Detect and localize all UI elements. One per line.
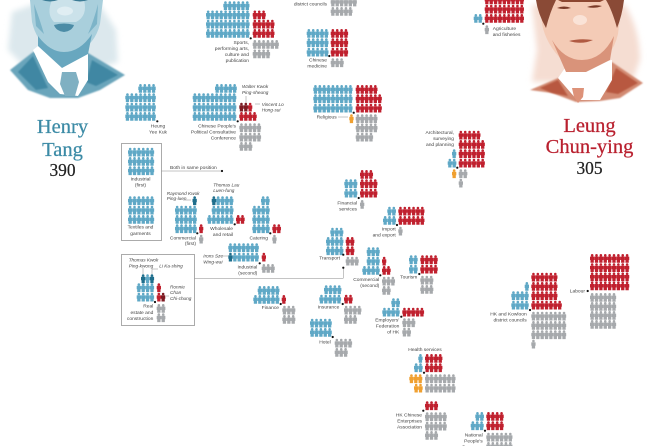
label: Hotel: Hotel	[319, 339, 331, 345]
grey voter	[199, 235, 203, 244]
grey voters	[331, 0, 357, 16]
group: Tourism	[400, 255, 438, 294]
label: Sports: publication	[226, 58, 249, 64]
blue voters	[362, 247, 380, 275]
marker dot	[358, 197, 360, 199]
panel: real estate and construction box	[122, 254, 194, 326]
group: Industrial (second)	[203, 243, 275, 276]
group: Chinese People's Political Consultative Conference	[191, 84, 284, 151]
label: Wholesale and retail: and retail	[213, 232, 233, 238]
group: HK Chinese Enterprises Association	[396, 401, 447, 440]
annotation: Li Ka-shing: Li Ka-shing	[159, 264, 183, 269]
label: Import and export: and export	[373, 233, 396, 239]
grey voters	[590, 293, 616, 329]
vote count: 390: 390	[49, 160, 76, 180]
blue voters	[409, 255, 418, 274]
label: Industrial (second): (second)	[238, 270, 258, 276]
label: Real estate and construction: estate and	[130, 310, 154, 316]
annotation: Raymond Kwok: Ping-luen	[167, 196, 187, 201]
red voters	[356, 85, 382, 112]
blue voters	[414, 354, 423, 372]
label: Labour: Labour	[570, 289, 585, 295]
marker dot	[269, 232, 271, 234]
blue voters	[344, 179, 357, 198]
label: Chinese medicine: medicine	[307, 64, 327, 70]
blue voters	[474, 14, 482, 23]
label: Sports: performing arts,	[215, 46, 249, 52]
blue voters	[448, 149, 456, 168]
annotation: Thomas Kwok: Thomas Kwok	[129, 258, 159, 263]
panel: both in same position box	[122, 144, 162, 240]
group: Wholesale and retail	[207, 182, 245, 238]
marker dot	[484, 430, 486, 432]
callout: both in same position	[162, 165, 223, 172]
heading: Henry Tang: Tang	[42, 139, 83, 161]
grey voters	[335, 339, 352, 357]
label: Real estate and construction: construction	[127, 316, 154, 322]
grey voters	[402, 318, 415, 336]
callout: both in same position: Both in same position	[170, 165, 217, 171]
red voters	[402, 308, 424, 316]
label: Chinese medicine: Chinese	[309, 58, 327, 64]
annotation: Ronnie Chan: Chi-chung	[170, 296, 192, 301]
label: HK Chinese Enterprises Association: Association	[397, 425, 422, 431]
red voters	[590, 254, 629, 290]
annotation: Irons Sze: Wing-wai	[203, 260, 223, 265]
label: Industrial (second): Industrial	[237, 264, 257, 270]
blue voters	[313, 85, 353, 112]
red voters	[346, 237, 354, 255]
group: Commercial (first)	[167, 191, 203, 247]
heading: Henry Tang: Henry	[37, 116, 89, 138]
label: Sports: culture and	[225, 52, 249, 58]
leader lines	[246, 96, 260, 104]
group: Commercial (second)	[353, 247, 395, 295]
label: Employers' Federation: of HK	[387, 330, 400, 336]
group: Catering	[250, 196, 281, 244]
label: Agriculture and fisheries: and fisheries	[493, 32, 521, 38]
label: Industrial (first): (first)	[135, 183, 146, 189]
blue voters	[511, 282, 529, 310]
marker dot	[423, 372, 425, 374]
red voters	[239, 103, 257, 121]
marker dot	[400, 316, 402, 318]
marker dot	[332, 336, 334, 338]
grey voters	[425, 412, 447, 440]
label: National People's Congress: People's	[464, 439, 483, 445]
orange voter	[452, 169, 456, 178]
annotation: Ronnie Chan: Ronnie	[170, 284, 185, 289]
red voters	[236, 215, 245, 224]
label: Commercial (second): Commercial	[353, 277, 379, 283]
red voters	[425, 401, 438, 410]
marker dot	[529, 309, 531, 311]
orange voter	[349, 114, 354, 123]
label: Financial services: Financial	[337, 200, 357, 206]
label: district councils: district councils	[294, 2, 328, 8]
blue voters	[193, 84, 237, 121]
label: Tourism: Tourism	[400, 274, 417, 280]
label: CPPCC: Political Consultative	[191, 129, 236, 135]
blue voters	[206, 1, 250, 38]
grey voters	[282, 306, 295, 324]
red voters	[382, 257, 391, 275]
red voters	[253, 10, 274, 38]
marker dot	[259, 262, 261, 264]
group: Heung Yee Kuk	[125, 84, 168, 136]
label: Heung Yee Kuk: Heung	[151, 124, 165, 130]
marker dot	[250, 37, 252, 39]
label: Architectural: surveying	[433, 136, 454, 142]
label: Financial services: services	[339, 206, 358, 212]
red voters	[459, 131, 485, 168]
red voters	[272, 224, 281, 233]
connector: real estate to transport	[194, 267, 344, 278]
marker dot	[353, 112, 355, 114]
marker dot	[196, 232, 198, 234]
red voters	[485, 0, 524, 23]
red voters	[331, 29, 348, 56]
group: Chinese medicine	[307, 29, 348, 70]
group: Insurance	[318, 285, 361, 324]
marker dot	[342, 303, 344, 305]
grey voters	[356, 114, 377, 142]
blue voters	[207, 196, 233, 224]
blue voters	[228, 243, 259, 262]
label: Textiles and garments: Textiles and	[128, 225, 154, 231]
blue voters	[326, 228, 343, 255]
annotation: Walter Kwok: Walter Kwok	[242, 84, 269, 89]
label: Insurance: Insurance	[318, 304, 340, 310]
Raymond Kwok voter	[192, 196, 197, 205]
label: Architectural: and planning	[426, 142, 454, 148]
red voters	[360, 170, 377, 198]
blue voters	[310, 319, 332, 337]
marker dot	[456, 167, 458, 169]
group: Import and export	[373, 207, 424, 239]
group: HK and Kowloon district councils	[490, 273, 566, 348]
annotation: Thomas Lau: Luen-fung	[213, 188, 235, 193]
red voter	[199, 224, 203, 233]
group: Financial services	[337, 170, 377, 212]
red voters	[398, 207, 424, 225]
annotation: Thomas Lau: Thomas Lau	[213, 182, 240, 187]
label: CPPCC: Conference	[211, 135, 236, 141]
annotation: Thomas Kwok: Ping-kwong	[129, 264, 154, 269]
heading: Henry Tang	[37, 116, 89, 180]
annotation: Vincent Lo: Hong-sui	[262, 107, 281, 112]
label: Import and export: Import	[382, 227, 396, 233]
label: HK Chinese Enterprises Association: Enterprises	[397, 419, 423, 425]
red voters	[420, 255, 438, 274]
Thomas Lau voter	[212, 196, 216, 205]
heading: Leung Chun-ying: Chun-ying	[546, 136, 633, 158]
grey voters	[420, 276, 433, 294]
label: Architectural: Architectural,	[425, 130, 454, 136]
label: Textiles and garments: garments	[130, 231, 151, 237]
group: Hotel	[310, 319, 352, 357]
label: CPPCC: Chinese People's	[198, 123, 237, 129]
label: Employers' Federation: Employers'	[375, 318, 399, 324]
red voters	[425, 354, 442, 372]
marker dot	[154, 301, 156, 303]
heading: Leung Chun-ying	[546, 115, 633, 178]
blue voters	[252, 196, 270, 233]
group: Agriculture and fisheries	[474, 0, 524, 38]
grey voters	[157, 304, 165, 322]
label: HK Chinese Enterprises Association: HK Chinese	[396, 413, 422, 419]
group: Health services	[408, 347, 456, 392]
grey voter	[398, 227, 403, 236]
grey voter	[485, 25, 489, 34]
label: Industrial (first): Industrial	[131, 177, 150, 183]
group: Architectural, surveying and planning	[425, 130, 485, 188]
grey voters	[239, 123, 261, 151]
grey voters	[346, 257, 359, 266]
annotation: Walter Kwok: Ping-sheung	[242, 90, 269, 95]
annotation: Raymond Kwok: Raymond Kwok	[167, 191, 200, 196]
marker dot	[342, 254, 344, 256]
group: Employers' Federation of HK	[375, 298, 424, 336]
group: Finance	[253, 286, 295, 324]
grey voters	[382, 277, 395, 295]
leaders voters	[141, 274, 154, 283]
label: HK and Kowloon district councils: district councils	[494, 317, 527, 323]
blue voters	[175, 206, 197, 233]
annotation: Ronnie Chan: Chan	[170, 290, 182, 295]
blue voters	[137, 283, 154, 302]
grey voters	[531, 312, 566, 348]
label: Heung Yee Kuk: Yee Kuk	[149, 130, 168, 136]
marker dot	[379, 274, 381, 276]
group: Religious	[313, 85, 382, 142]
label: Catering: Catering	[250, 236, 268, 242]
marker dot	[280, 303, 282, 305]
label: Agriculture and fisheries: Agriculture	[493, 26, 516, 32]
group: Labour	[570, 254, 629, 329]
label: Transport: Transport	[319, 256, 341, 262]
grey voter	[272, 235, 277, 244]
grey voters	[425, 374, 456, 392]
label: Commercial (second): (second)	[360, 283, 380, 289]
annotation: Vincent Lo: Vincent Lo	[262, 102, 284, 107]
label: Sports: Sports,	[234, 40, 249, 46]
red voters	[486, 412, 504, 430]
heading: Leung Chun-ying: Leung	[563, 115, 616, 137]
grey voters	[459, 169, 467, 188]
marker dot	[482, 23, 484, 25]
label: Health services: Health services	[408, 347, 442, 353]
red voter	[262, 253, 266, 262]
Irons Sze voter	[228, 253, 233, 262]
grey voter	[360, 200, 364, 209]
group: Sports, performing arts, culture and publication	[206, 1, 279, 64]
label: Finance: Finance	[262, 305, 279, 311]
blue voters	[319, 285, 341, 304]
vote count: 305: 305	[576, 158, 603, 178]
annotation: Irons Sze: Irons Sze	[203, 254, 223, 259]
Industrial (first) voters	[128, 148, 154, 175]
group: Transport	[319, 228, 359, 266]
marker dot	[234, 223, 236, 225]
grey voters	[253, 40, 279, 58]
marker dot	[422, 410, 424, 412]
group: New Territories district councils	[294, 0, 357, 16]
orange voters	[409, 374, 423, 392]
red voter	[282, 295, 286, 304]
grey voters	[262, 264, 275, 273]
label: Commercial (first): Commercial	[170, 235, 196, 241]
blue voters	[307, 29, 328, 56]
red voters	[531, 273, 562, 310]
blue voters	[253, 286, 279, 304]
marker dot	[156, 120, 158, 122]
grey voters	[486, 433, 512, 446]
label: Religious: Religious	[317, 114, 337, 120]
label: Employers' Federation: Federation	[376, 324, 400, 330]
marker dot	[396, 224, 398, 226]
label: Wholesale and retail: Wholesale	[210, 226, 233, 232]
blue voters	[125, 84, 156, 121]
group: National People's Congress	[462, 412, 512, 446]
red voters	[157, 283, 165, 302]
marker dot	[418, 273, 420, 275]
grey voters	[331, 58, 344, 67]
portrait: Leung Chun-ying	[530, 0, 643, 103]
label: Commercial (first): (first)	[185, 241, 196, 247]
blue voters	[383, 207, 396, 225]
marker dot	[587, 290, 589, 292]
grey voters	[344, 306, 361, 324]
label: HK and Kowloon district councils: HK and Kowloon	[490, 311, 527, 317]
blue voters	[382, 298, 400, 316]
label: Real estate and construction: Real	[143, 304, 153, 310]
red voters	[344, 295, 353, 304]
blue voters	[471, 412, 484, 430]
Textiles voters	[128, 196, 154, 224]
marker dot	[328, 55, 330, 57]
portrait: Henry Tang	[8, 0, 125, 98]
label: National People's Congress: National	[465, 433, 483, 439]
marker dot	[237, 120, 239, 122]
